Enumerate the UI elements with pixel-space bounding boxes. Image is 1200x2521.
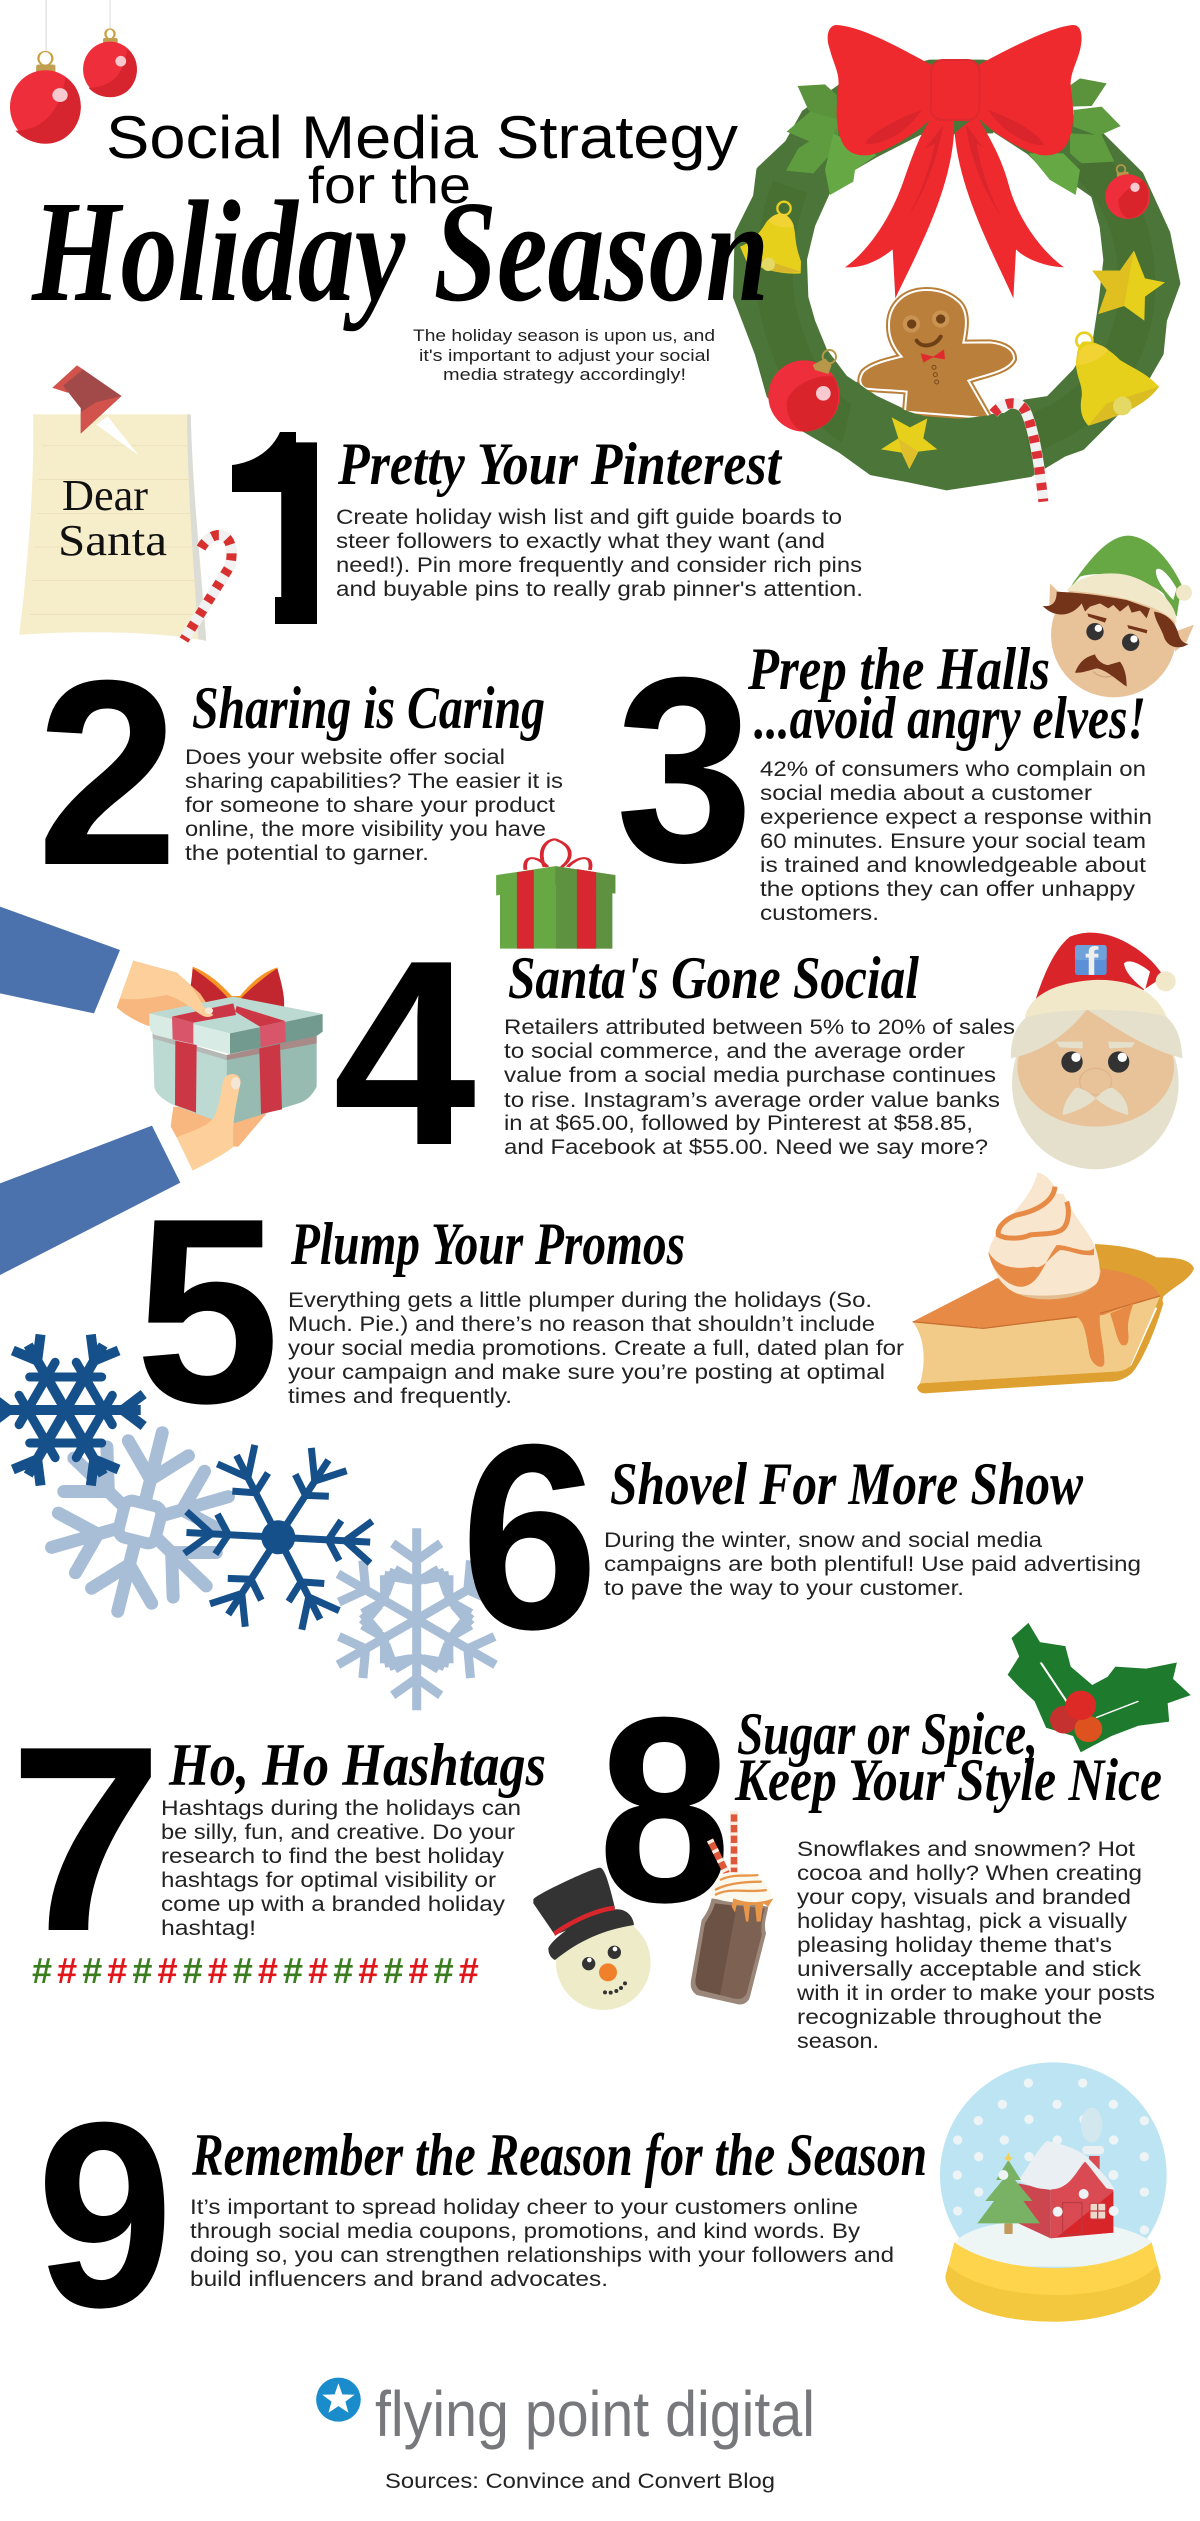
body 3: experience expect a response within — [760, 806, 1152, 829]
hashtag row: # — [208, 1950, 228, 1991]
hashtag row: # — [308, 1950, 328, 1991]
holly leaves — [786, 60, 1121, 195]
body 4: value from a social media purchase continues — [504, 1064, 996, 1087]
body 8: holiday hashtag, pick a visually — [797, 1910, 1128, 1933]
section 7 — [9, 1691, 546, 1991]
body 8: season. — [797, 2030, 879, 2053]
body 6: campaigns are both plentiful! Use paid advertising — [604, 1553, 1141, 1576]
body 7: be silly, fun, and creative. Do your — [161, 1821, 515, 1844]
section 3 — [616, 622, 1152, 925]
title line 2: for the — [308, 157, 471, 215]
globe base — [945, 2242, 1161, 2322]
body 5: Everything gets a little plumper during the holidays (So. — [288, 1289, 872, 1312]
icon: snowman — [533, 1868, 651, 2010]
body 2: Does your website offer social — [185, 746, 505, 769]
body 8: pleasing holiday theme that's — [797, 1934, 1112, 1957]
bow on gift — [188, 967, 284, 1009]
body 5: Much. Pie.) and there’s no reason that shouldn’t include — [288, 1313, 875, 1336]
body 4: and Facebook at $55.00. Need we say more? — [504, 1136, 988, 1159]
hashtag row: # — [57, 1950, 77, 1991]
body 4: to social commerce, and the average order — [504, 1040, 965, 1063]
body 2: the potential to garner. — [185, 842, 429, 865]
right bell — [1076, 333, 1159, 426]
icon: Santa with Facebook hat — [1011, 933, 1182, 1169]
body 7: hashtag! — [161, 1917, 256, 1940]
heading 4: Santa's Gone Social — [508, 945, 919, 1011]
icon: snow globe — [940, 2062, 1167, 2322]
icon: hot cocoa jar — [691, 1811, 773, 2005]
body 9: doing so, you can strengthen relationships with your followers and — [190, 2244, 894, 2267]
heading 2: Sharing is Caring — [192, 675, 545, 741]
hashtag row: # — [107, 1950, 127, 1991]
body 8: Snowflakes and snowmen? Hot — [797, 1838, 1135, 1861]
body 9: through social media coupons, promotions, and kind words. By — [190, 2220, 861, 2243]
section 5 — [135, 1163, 904, 1458]
body 3: customers. — [760, 902, 879, 925]
intro text: it's important to adjust your social — [419, 346, 710, 365]
title — [30, 104, 769, 332]
number 6: 6 — [460, 1389, 598, 1684]
heading 9: Remember the Reason for the Season — [191, 2122, 927, 2188]
section 9 — [36, 2067, 927, 2362]
heading 6: Shovel For More Show — [610, 1451, 1084, 1517]
sources: Sources: Convince and Convert Blog — [385, 2470, 775, 2493]
body 2: for someone to share your product — [185, 794, 555, 817]
body 1: Create holiday wish list and gift guide boards to — [336, 506, 842, 529]
sleeves — [0, 907, 180, 1275]
icon: Dear Santa note — [19, 365, 206, 641]
icon: hanging ornaments — [10, 0, 137, 144]
snow dots back — [953, 2078, 1149, 2235]
body 5: your social media promotions. Create a full, dated plan for — [288, 1337, 904, 1360]
small ornament — [1105, 165, 1150, 219]
hashtag row: # — [82, 1950, 102, 1991]
number 9: 9 — [36, 2067, 174, 2362]
hands — [120, 961, 241, 1171]
body 3: social media about a customer — [760, 782, 1092, 805]
hashtag row: # — [183, 1950, 203, 1991]
number 4: 4 — [333, 905, 478, 1200]
body 1: and buyable pins to really grab pinner's attention. — [336, 578, 863, 601]
number 3: 3 — [616, 622, 754, 917]
body 2: sharing capabilities? The easier it is — [185, 770, 563, 793]
body 6: During the winter, snow and social media — [604, 1529, 1042, 1552]
hashtag row: # — [233, 1950, 253, 1991]
logo star badge — [316, 2378, 361, 2422]
number 1: 1 — [212, 385, 377, 680]
heading 3: Prep the Halls — [747, 636, 1050, 702]
house — [1018, 2141, 1115, 2238]
heading 7: Ho, Ho Hashtags — [168, 1732, 546, 1798]
intro text: media strategy accordingly! — [443, 365, 686, 384]
body 8: cocoa and holly? When creating — [797, 1862, 1142, 1885]
green ring — [737, 63, 1177, 487]
body 8: your copy, visuals and branded — [797, 1886, 1131, 1909]
heading 5: Plump Your Promos — [290, 1211, 685, 1277]
title line 1: Social Media Strategy — [106, 104, 738, 171]
body 1: need!). Pin more frequently and consider rich pins — [336, 554, 862, 577]
hashtag row: # — [258, 1950, 278, 1991]
snowflake light 4 — [322, 1528, 511, 1710]
body 1: steer followers to exactly what they want (and — [336, 530, 825, 553]
hashtag row: # — [32, 1950, 52, 1991]
body 7: come up with a branded holiday — [161, 1893, 506, 1916]
icon: candy cane by note — [184, 535, 232, 640]
section 2 — [36, 625, 563, 920]
section 1 — [232, 432, 862, 624]
right star — [1092, 251, 1165, 321]
icon: angry elf — [1043, 536, 1194, 697]
body 3: 42% of consumers who complain on — [760, 758, 1146, 781]
heading 1: Pretty Your Pinterest — [337, 431, 783, 497]
icon: hands holding gift — [0, 907, 323, 1275]
snowflake dark 1 — [0, 1305, 170, 1515]
heading 8: Sugar or Spice, — [737, 1701, 1038, 1767]
note text: Santa — [58, 516, 167, 565]
hashtag row: # — [459, 1950, 479, 1991]
hashtag row: # — [358, 1950, 378, 1991]
body 8: with it in order to make your posts — [796, 1982, 1155, 2005]
number 1 — [232, 432, 317, 624]
body 4: Retailers attributed between 5% to 20% of sales — [504, 1016, 1015, 1039]
icon: pumpkin pie — [913, 1173, 1194, 1393]
note text: Dear — [62, 471, 148, 520]
snowflake light 2 — [25, 1410, 255, 1634]
body 4: in at $65.00, followed by Pinterest at $58.85, — [504, 1112, 973, 1135]
body 7: hashtags for optimal visibility or — [161, 1869, 496, 1892]
section 4 — [333, 905, 1015, 1200]
number 8: 8 — [598, 1662, 731, 1957]
body 7: research to find the best holiday — [161, 1845, 505, 1868]
hashtag row: # — [333, 1950, 353, 1991]
icon: green gift box — [496, 839, 615, 949]
hashtag row: # — [383, 1950, 403, 1991]
number 7: 7 — [9, 1691, 163, 1986]
bow — [828, 25, 1082, 298]
snow dots front — [998, 2170, 1119, 2217]
hashtag row: # — [408, 1950, 429, 1991]
body 9: It’s important to spread holiday cheer to your customers online — [190, 2196, 858, 2219]
body 8: recognizable throughout the — [797, 2006, 1102, 2029]
hashtag row: # — [283, 1950, 303, 1991]
intro text: The holiday season is upon us, and — [413, 326, 715, 345]
body 3: is trained and knowledgeable about — [760, 854, 1146, 877]
title script line: Holiday Season — [30, 172, 769, 332]
hashtag row: # — [158, 1950, 178, 1991]
body 8: universally acceptable and stick — [797, 1958, 1142, 1981]
facebook f: f — [1085, 940, 1099, 984]
number 5: 5 — [135, 1163, 280, 1458]
left bell — [740, 202, 801, 274]
body 2: online, the more visibility you have — [185, 818, 546, 841]
body 5: your campaign and make sure you’re posting at optimal — [288, 1361, 885, 1384]
icon: holly — [1008, 1623, 1191, 1752]
body 9: build influencers and brand advocates. — [190, 2268, 608, 2291]
section 6 — [460, 1389, 1141, 1684]
logo wordmark: flying point digital — [375, 2378, 815, 2450]
body 7: Hashtags during the holidays can — [161, 1797, 521, 1820]
snowflake dark 3 — [151, 1410, 405, 1665]
tree — [977, 2152, 1040, 2234]
snowflakes — [0, 1305, 511, 1710]
hashtag row: # — [434, 1950, 454, 1991]
candy cane — [993, 403, 1043, 502]
icon: wreath — [737, 25, 1177, 502]
gingerbread man — [860, 290, 1014, 418]
body 6: to pave the way to your customer. — [604, 1577, 964, 1600]
large ornament — [768, 350, 840, 432]
body 3: 60 minutes. Ensure your social team — [760, 830, 1146, 853]
body 5: times and frequently. — [288, 1385, 512, 1408]
numbers and text blocks — [9, 385, 1162, 2362]
gift body — [149, 997, 323, 1123]
logo — [316, 2378, 815, 2450]
small star — [881, 417, 937, 469]
number 2: 2 — [36, 625, 178, 920]
body 4: to rise. Instagram’s average order value banks — [504, 1089, 1000, 1112]
body 3: the options they can offer unhappy — [760, 878, 1136, 901]
section 8 — [598, 1662, 1162, 2053]
hashtag row: # — [132, 1950, 152, 1991]
